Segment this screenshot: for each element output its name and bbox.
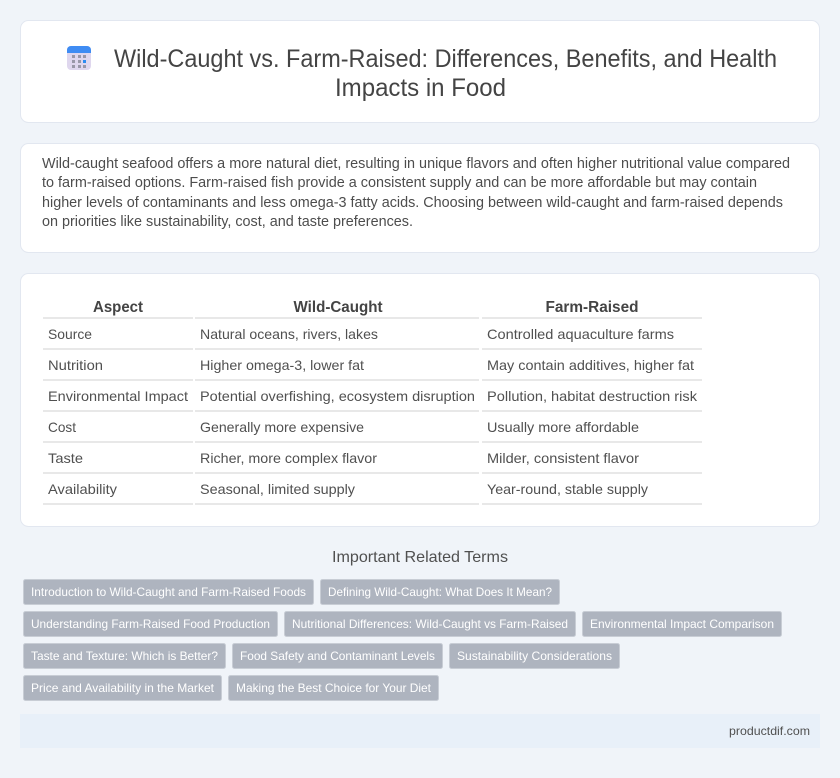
text block: summary bbox=[42, 156, 790, 230]
table header: Aspect bbox=[93, 299, 144, 316]
heading: related terms: Important Related Terms bbox=[332, 549, 508, 566]
table row: environmental impact: Environmental Impact bbox=[48, 388, 188, 404]
table row: nutrition bbox=[48, 357, 694, 373]
tag list: Food Safety and Contaminant Levels bbox=[240, 649, 435, 663]
table row: taste: Milder, consistent flavor bbox=[487, 450, 639, 466]
tag list bbox=[24, 580, 782, 700]
table row: nutrition: Higher omega-3, lower fat bbox=[200, 357, 364, 373]
footer source text: productdif.com bbox=[729, 724, 810, 738]
table row: source: Natural oceans, rivers, lakes bbox=[200, 326, 378, 342]
tag list: Making the Best Choice for Your Diet bbox=[236, 681, 432, 695]
table row: environmental impact: Potential overfishing, ecosystem disruption bbox=[200, 388, 475, 404]
table header bbox=[93, 299, 638, 316]
title: Wild-Caught vs. Farm-Raised: Differences, Benefits, and Health bbox=[114, 45, 777, 73]
table row: cost: Usually more affordable bbox=[487, 419, 639, 435]
text block: summary: higher levels of contaminants and less omega-3 fatty acids. Choosing between wild-caught and farm-raised depends bbox=[42, 195, 783, 211]
table row: taste: Richer, more complex flavor bbox=[200, 450, 377, 466]
panel: comparison table bbox=[20, 274, 820, 526]
tag list: Nutritional Differences: Wild-Caught vs Farm-Raised bbox=[292, 617, 568, 631]
table row: cost: Generally more expensive bbox=[200, 419, 364, 435]
table row: source: Source bbox=[48, 326, 92, 342]
panel: summary paragraph bbox=[20, 144, 820, 252]
text block: summary: to farm-raised options. Farm-raised fish provide a consistent supply and can be more affordable but may contain bbox=[42, 175, 757, 191]
table row: source: Controlled aquaculture farms bbox=[487, 326, 674, 342]
table row: availability bbox=[48, 481, 648, 497]
tag list: Sustainability Considerations bbox=[457, 649, 612, 663]
tag list: Taste and Texture: Which is Better? bbox=[31, 649, 218, 663]
tag list: Understanding Farm-Raised Food Production bbox=[31, 617, 270, 631]
tag list: Defining Wild-Caught: What Does It Mean? bbox=[328, 585, 552, 599]
table row: nutrition: May contain additives, higher fat bbox=[487, 357, 694, 373]
table row: environmental impact bbox=[48, 388, 698, 404]
table row: taste bbox=[48, 450, 639, 466]
table row: source bbox=[48, 326, 674, 342]
text block: summary: on priorities like sustainability, cost, and taste preferences. bbox=[42, 214, 413, 230]
tag list: Environmental Impact Comparison bbox=[590, 617, 774, 631]
tag list: Introduction to Wild-Caught and Farm-Raised Foods bbox=[31, 585, 306, 599]
title: Impacts in Food bbox=[335, 74, 506, 102]
table header: Wild-Caught bbox=[294, 299, 383, 316]
panel: title header bbox=[20, 20, 820, 122]
table row: cost: Cost bbox=[48, 419, 76, 435]
table header: Farm-Raised bbox=[546, 299, 638, 316]
table row: cost bbox=[48, 419, 639, 435]
icon: calendar bbox=[67, 46, 91, 70]
text block: summary: Wild-caught seafood offers a more natural diet, resulting in unique flavors and often higher nutritional value compared bbox=[42, 156, 790, 172]
tag list: Price and Availability in the Market bbox=[31, 681, 215, 695]
table row: availability: Year-round, stable supply bbox=[487, 481, 648, 497]
table row: taste: Taste bbox=[48, 450, 83, 466]
table row: availability: Seasonal, limited supply bbox=[200, 481, 355, 497]
table row: environmental impact: Pollution, habitat destruction risk bbox=[487, 388, 698, 404]
table row: availability: Availability bbox=[48, 481, 117, 497]
title bbox=[114, 45, 777, 102]
footer bar bbox=[20, 714, 820, 748]
table row: nutrition: Nutrition bbox=[48, 357, 103, 373]
